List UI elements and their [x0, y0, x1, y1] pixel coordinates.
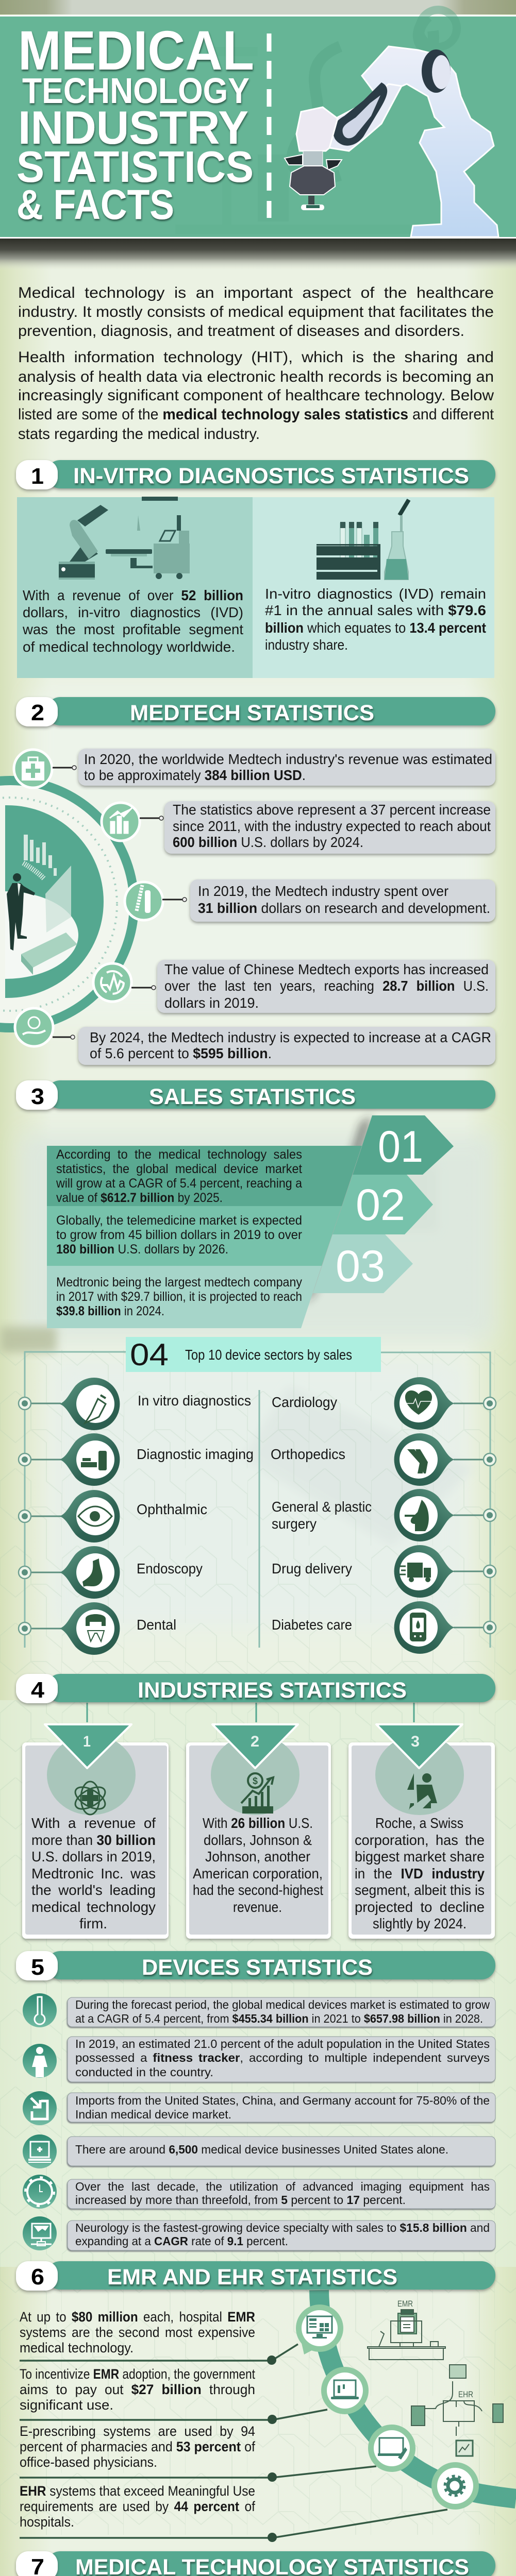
card: Johnson and Johnson: With 26 billion U.S. [203, 1815, 313, 1831]
heading: top 10 device sectors: Top 10 device sectors by sales [185, 1347, 352, 1363]
text: $79.6 billion: industry share. [265, 637, 348, 653]
card: Johnson and Johnson: dollars, Johnson & [204, 1832, 312, 1848]
text: 52 billion: With a revenue of over 52 billion [23, 587, 243, 603]
panel 3 [47, 1234, 413, 1328]
card: Medtronic: the world's leading [31, 1882, 156, 1898]
icon: tablet [378, 2438, 407, 2460]
panel 1: 01 [378, 1122, 423, 1172]
section 6 heading [16, 2261, 495, 2291]
text: $79.6 billion: #1 in the annual sales with $79.6 [265, 602, 486, 618]
icon: surgical robot [59, 497, 190, 580]
card: Roche: projected to decline [355, 1899, 485, 1915]
timeline: EMR curve [319, 2290, 516, 2499]
section 4 heading: INDUSTRIES STATISTICS [138, 1678, 407, 1703]
header banner [0, 10, 516, 239]
EMR fact 3: E-prescribing systems are used by 94 [20, 2424, 255, 2439]
EMR fact 4 [20, 2462, 479, 2542]
callout: 384 billion [78, 749, 495, 786]
card: Medtronic: With a revenue of [31, 1815, 156, 1831]
section 3 heading: 3 [31, 1084, 44, 1109]
card: Roche [348, 1724, 495, 1939]
card: Medtronic [22, 1724, 169, 1939]
title: MEDICAL [18, 19, 254, 81]
panel 1 [47, 1115, 454, 1206]
EMR fact 2 [20, 2366, 369, 2424]
intro text: analysis of health data via electronic health records is becoming an [18, 368, 494, 385]
dark band under banner [0, 239, 516, 270]
sector: Drug delivery [272, 1545, 496, 1598]
section 5 heading: DEVICES STATISTICS [142, 1955, 373, 1980]
title [16, 19, 254, 228]
device stat: advanced imaging: Over the last decade, the utilization of advanced imaging equipment has [75, 2180, 490, 2193]
callout: 31 billion: In 2019, the Medtech industry spent over [198, 883, 448, 899]
sector: Ophthalmic: Ophthalmic [137, 1501, 207, 1517]
icon circle: globe in hand [15, 1008, 75, 1046]
card: Johnson and Johnson [186, 1724, 331, 1939]
callout: $595 billion: By 2024, the Medtech industry is expected to increase at a CAGR [90, 1029, 491, 1045]
sector: Dental: Dental [137, 1617, 176, 1633]
intro text: increasingly significant component of healthcare technology. Below [18, 387, 494, 404]
radial diagram: medtech [0, 750, 187, 1046]
intro text: prevention, diagnosis, and treatment of diseases and disorders. [18, 323, 464, 340]
intro text: Medical technology is an important aspect of the healthcare [18, 284, 494, 301]
icon: money growth: $ [253, 1776, 258, 1787]
sector: Cardiology: Cardiology [272, 1394, 337, 1410]
text: $79.6 billion [265, 586, 486, 653]
icon circle: test tube and ruler [125, 882, 187, 920]
intro text [18, 284, 494, 443]
sector: Diabetes care [272, 1601, 496, 1654]
card: Medtronic: medical technology [31, 1899, 156, 1915]
card: Johnson and Johnson: 2 [251, 1733, 259, 1750]
figure: analyst [7, 873, 35, 951]
card: Medtronic: U.S. dollars in 2019, [31, 1849, 156, 1865]
callout: 384 billion: In 2020, the worldwide Medtech industry's revenue was estimated [84, 751, 492, 767]
heading: top 10 device sectors [126, 1337, 381, 1372]
section 4 heading [16, 1674, 495, 1722]
faded robot watermark [175, 10, 457, 229]
device stat: imports: Imports from the United States, China, and Germany account for 75-80% of the [75, 2094, 490, 2107]
sector: Diabetes care: Diabetes care [272, 1617, 352, 1633]
panel 3: $39.8 billion in 2024. [56, 1304, 164, 1318]
icon: monitor dashboard [307, 2316, 332, 2338]
title: STATISTICS [16, 143, 254, 192]
EMR fact 4: EHR systems that exceed Meaningful Use [20, 2483, 255, 2499]
panel 2 [47, 1175, 433, 1266]
device stat: fitness tracker: possessed a fitness tracker , according to multiple independent surveys [75, 2051, 490, 2064]
EMR fact 1: medical technology. [20, 2340, 134, 2355]
section 2 heading: MEDTECH STATISTICS [130, 701, 374, 725]
card: Medtronic: 1 [83, 1733, 91, 1750]
callout: 31 billion: 31 billion dollars on research and development. [198, 900, 490, 916]
callout: 28.7 billion: over the last ten years, reaching 28.7 billion U.S. [164, 978, 489, 994]
intro text: industry. It mostly consists of medical equipment that facilitates the [18, 303, 494, 320]
EMR fact 3: percent of pharmacies and 53 percent of [20, 2439, 255, 2454]
callout: 384 billion: to be approximately 384 billion USD. [84, 767, 306, 783]
section 5 heading: 5 [31, 1955, 44, 1980]
card: Roche: 3 [411, 1733, 420, 1750]
device stat: advanced imaging: increased by more than threefold, from 5 percent to 17 percent. [75, 2193, 406, 2207]
section 6 heading: 6 [31, 2264, 44, 2290]
device stat: neurology: expanding at a CAGR rate of 9.1 percent. [75, 2234, 288, 2248]
intro text: stats regarding the medical industry. [18, 426, 260, 443]
illustration: EHR network [411, 2365, 503, 2456]
title: INDUSTRY [18, 102, 248, 154]
section 3 heading [16, 1080, 495, 1110]
illustration: EHR network: EHR [458, 2389, 473, 2399]
EMR fact 3 [20, 2424, 415, 2482]
top strip [0, 0, 516, 14]
section 4 heading: 4 [31, 1677, 45, 1703]
heading: top 10 device sectors: 04 [130, 1337, 169, 1372]
sector: Cardiology [272, 1377, 496, 1430]
device stat: imports: Indian medical device market. [75, 2108, 231, 2121]
EMR fact 1 [20, 2304, 343, 2365]
panel 2: 180 billion U.S. dollars by 2026. [56, 1242, 228, 1257]
card: Johnson and Johnson: American corporation, [193, 1866, 323, 1882]
text: 52 billion: dollars, in-vitro diagnostics (IVD) [23, 604, 243, 620]
section 1 heading: IN-VITRO DIAGNOSTICS STATISTICS [73, 464, 469, 488]
EMR fact 4: hospitals. [20, 2514, 74, 2530]
card: Roche: Roche, a Swiss [375, 1815, 463, 1831]
card: Johnson and Johnson: had the second-highest [193, 1882, 323, 1898]
card: Johnson and Johnson: revenue. [233, 1899, 282, 1915]
callout: 600 billion: since 2011, with the industry expected to reach about [173, 818, 491, 834]
icon: atom cross [72, 1782, 109, 1815]
text: 52 billion: was the most profitable segment [22, 621, 243, 637]
callout: $595 billion [78, 1027, 495, 1065]
icon: money growth [241, 1773, 273, 1814]
sector: General and plastic surgery: General & plastic [272, 1499, 372, 1515]
card: Roche: corporation, has the [355, 1832, 485, 1848]
intro text: Health information technology (HIT), which is the sharing and [18, 349, 494, 366]
panel: IVD right [253, 497, 494, 678]
icon: laptop [331, 2380, 359, 2399]
EMR fact 4: requirements are used by 44 percent of [20, 2499, 255, 2514]
section 1 heading [16, 460, 495, 489]
sector: General and plastic surgery [272, 1489, 496, 1541]
text: 52 billion [22, 587, 243, 655]
section 2 heading: 2 [31, 700, 44, 725]
card: Roche: segment, albeit this is [355, 1882, 485, 1898]
device stat: advanced imaging [23, 2175, 495, 2209]
dashed divider [267, 33, 271, 218]
card: Roche: in the IVD industry [355, 1866, 485, 1882]
section 6 heading: EMR AND EHR STATISTICS [107, 2265, 397, 2290]
EMR fact 2: aims to pay out $27 billion through [20, 2382, 255, 2397]
device stat: fitness tracker: conducted in the country. [75, 2065, 213, 2079]
icon: gear [445, 2476, 464, 2496]
device stat: market forecast: During the forecast period, the global medical devices market is estimated to grow [75, 1998, 490, 2011]
callout: 28.7 billion: dollars in 2019. [164, 995, 259, 1011]
card: Medtronic: more than 30 billion [31, 1832, 156, 1848]
panel 2: 02 [356, 1180, 405, 1230]
illustration: EMR desk [368, 2299, 445, 2360]
EMR fact 1: At up to $80 million each, hospital EMR [20, 2309, 255, 2325]
sector: Drug delivery: Drug delivery [272, 1561, 352, 1577]
panel 3: 03 [336, 1242, 385, 1291]
sales panels [47, 1115, 454, 1328]
panel 2: Globally, the telemedicine market is expected [56, 1213, 302, 1228]
sector: General and plastic surgery: surgery [272, 1516, 317, 1532]
EMR fact 2: To incentivize EMR adoption, the government [20, 2366, 255, 2382]
intro text: listed are some of the medical technology sales statistics and different [18, 406, 494, 423]
sector: Diagnostic imaging: Diagnostic imaging [137, 1446, 254, 1462]
callout: 600 billion: The statistics above represent a 37 percent increase [173, 802, 491, 818]
device stat: 6,500 businesses [23, 2134, 495, 2168]
sector: In vitro diagnostics: In vitro diagnostics [138, 1393, 251, 1409]
section 2 heading [16, 697, 495, 726]
card: Johnson and Johnson: Johnson, another [205, 1849, 310, 1865]
callout: 28.7 billion [157, 960, 495, 1013]
device stat: market forecast [23, 1993, 495, 2027]
illustration: EMR desk: EMR [397, 2299, 413, 2309]
icon circle: pulse [93, 963, 156, 1002]
device stat: fitness tracker: In 2019, an estimated 21.0 percent of the adult population in the United States [75, 2037, 490, 2050]
panel: IVD left [17, 497, 253, 678]
callout: $595 billion: of 5.6 percent to $595 billion. [90, 1045, 272, 1061]
sector: Orthopedics [271, 1433, 496, 1486]
device stat: 6,500 businesses: There are around 6,500 medical device businesses United States alone. [75, 2143, 448, 2156]
text: $79.6 billion: billion which equates to 13.4 percent [265, 620, 486, 636]
card: Medtronic: firm. [79, 1916, 107, 1931]
callout: 600 billion: 600 billion U.S. dollars by 2024. [173, 834, 363, 850]
icon: person with house [407, 1773, 437, 1814]
sector: Endoscopy [19, 1546, 203, 1599]
robot arm [285, 46, 498, 237]
EMR fact 2: significant use. [20, 2397, 113, 2413]
sector: Orthopedics: Orthopedics [271, 1446, 345, 1462]
sector: Dental [19, 1602, 176, 1655]
EMR fact 3: office-based physicians. [20, 2454, 157, 2470]
panel 1: will grow at a CAGR of 5.4 percent, reaching a [56, 1176, 302, 1191]
icon circle: growth chart [102, 803, 163, 841]
panel 3: Medtronic being the largest medtech company [56, 1275, 302, 1290]
panel 3: in 2017 with $29.7 billion, it is projected to reach [56, 1290, 302, 1304]
section 3 heading: SALES STATISTICS [149, 1084, 356, 1109]
callout: 28.7 billion: The value of Chinese Medtech exports has increased [164, 961, 489, 977]
device stat: neurology [23, 2216, 495, 2250]
sector: Ophthalmic [19, 1490, 207, 1543]
card: Roche: biggest market share [355, 1849, 485, 1865]
sector: Endoscopy: Endoscopy [137, 1561, 203, 1577]
panel 2: to grow from 45 billion dollars in 2019 to over [56, 1228, 302, 1242]
sector: Diagnostic imaging [19, 1433, 254, 1486]
callout: 600 billion [164, 801, 495, 854]
frame: top 10 sectors [25, 1352, 490, 1648]
text: 52 billion: of medical technology worldwide. [23, 639, 235, 655]
card: Roche: slightly by 2024. [373, 1916, 467, 1931]
device stat: imports [23, 2091, 495, 2125]
callout: 31 billion [190, 879, 495, 922]
title: TECHNOLOGY [22, 71, 249, 111]
panel 1: value of $612.7 billion by 2025. [56, 1191, 223, 1205]
section 5 heading [16, 1951, 495, 1980]
panel 1: statistics, the global medical device market [56, 1162, 302, 1176]
EMR fact 1: systems are the second most expensive [20, 2325, 255, 2340]
title: & FACTS [16, 181, 174, 228]
device stat: market forecast: at a CAGR of 5.4 percent, from $455.34 billion in 2021 to $657.98 billion in 2028. [75, 2012, 483, 2025]
device stat: fitness tracker [23, 2037, 495, 2082]
icon: test tubes and flask [317, 500, 409, 580]
section 1 heading: 1 [31, 464, 44, 489]
icon circle: medical case [14, 750, 76, 788]
text: $79.6 billion: In-vitro diagnostics (IVD) remain [265, 586, 486, 602]
device stat: neurology: Neurology is the fastest-growing device specialty with sales to $15.8 billion and [75, 2221, 490, 2234]
panel 1: According to the medical technology sales [56, 1147, 302, 1162]
sector: In vitro diagnostics [19, 1378, 251, 1430]
card: Medtronic: Medtronic Inc. was [31, 1866, 156, 1882]
